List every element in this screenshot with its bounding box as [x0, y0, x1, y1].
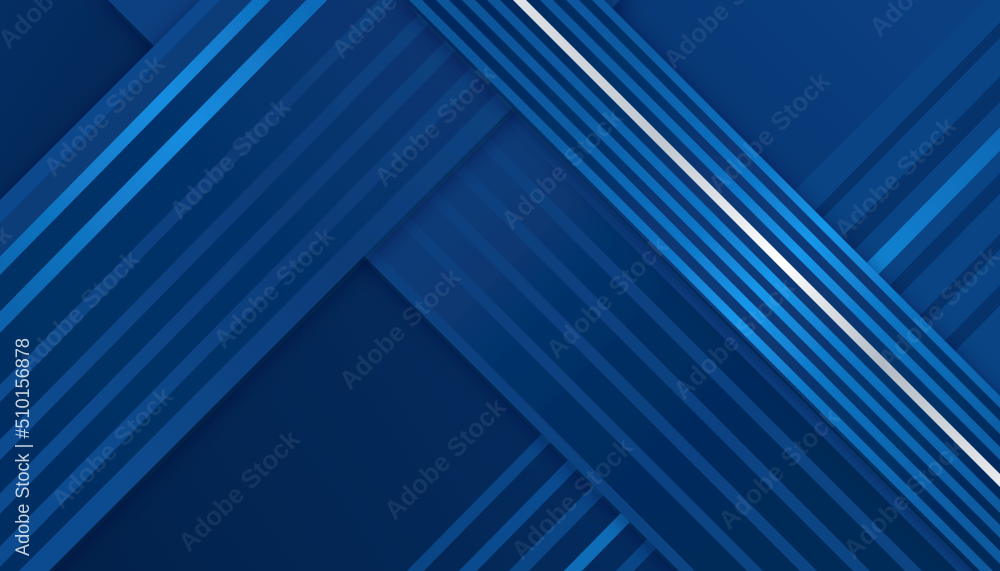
- watermarks: Adobe Stock: [667, 271, 801, 405]
- silver stripe: [503, 0, 1000, 571]
- bottom diagonal stripes: [407, 434, 656, 571]
- watermarks: Adobe Stock: [378, 391, 512, 525]
- upper-right diagonal bands: [404, 0, 1000, 571]
- watermarks: Adobe Stock: [333, 261, 467, 395]
- bottom triangle panel: [0, 0, 689, 571]
- watermarks: Adobe Stock: [828, 110, 962, 244]
- watermarks: Adobe Stock: [12, 243, 146, 377]
- watermarks: Adobe Stock: [702, 65, 836, 199]
- top-left dark panel: [0, 0, 210, 210]
- central stripes band: [395, 0, 1000, 571]
- watermarks: Adobe Stock: [172, 423, 306, 557]
- edge band: [0, 0, 230, 571]
- bright bottom stripe: [564, 513, 630, 571]
- watermarks: Adobe Stock: [163, 91, 297, 225]
- stock id label: Adobe Stock | #510156878: [13, 338, 34, 556]
- watermarks: Adobe Stock: [712, 401, 846, 535]
- left diagonal band: [0, 0, 630, 571]
- watermarks: Adobe Stock: [495, 101, 629, 235]
- watermarks: Adobe Stock: [540, 230, 674, 364]
- bright stripe: [554, 0, 1000, 571]
- watermarks: Adobe Stock: [37, 48, 171, 182]
- watermarks: Adobe Stock: [837, 430, 971, 564]
- watermarks: Adobe Stock: [45, 380, 179, 514]
- bright stripes: [0, 0, 280, 571]
- watermarks: Adobe Stock: [207, 220, 341, 354]
- watermarks: Adobe Stock: [368, 58, 502, 192]
- watermarks: Adobe Stock: [505, 431, 639, 565]
